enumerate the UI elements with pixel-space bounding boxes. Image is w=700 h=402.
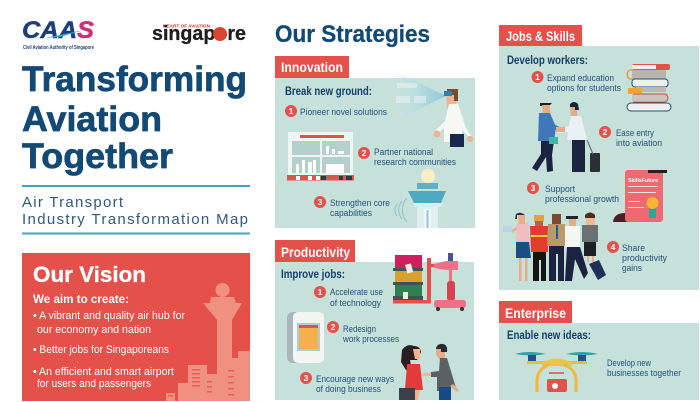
tab: jobs and skills — [499, 25, 582, 46]
item 3 — [527, 182, 619, 204]
item 2 — [599, 126, 662, 148]
item 3 — [314, 196, 390, 218]
item 4: Share — [622, 243, 645, 253]
subheading: break new ground: Break new ground: — [285, 86, 372, 98]
item 3: 3 — [531, 183, 536, 193]
subheading: develop workers: Develop workers: — [507, 55, 588, 67]
item 4: productivity — [622, 253, 667, 263]
item 3: of doing business — [316, 384, 381, 394]
text: develop new businesses: businesses together — [607, 368, 681, 378]
icon: research dashboard screen — [287, 132, 354, 180]
vision list — [33, 310, 185, 390]
item 3: 3 — [318, 197, 323, 207]
icon: baggage scanner — [393, 253, 466, 311]
item 3: professional growth — [545, 194, 619, 204]
item 2: Partner national — [374, 147, 433, 157]
subtitle: Air Transport — [22, 194, 124, 211]
subtitle: Industry Transformation Map — [22, 211, 248, 228]
item 3: 3 — [304, 373, 309, 383]
icon: control tower — [395, 169, 446, 228]
logo: Heart of Aviation Singapore: HEART OF AVIATION — [163, 24, 210, 28]
heading: our strategies: Our Strategies — [275, 21, 430, 48]
item 2: Redesign — [343, 324, 376, 334]
subheading: improve jobs: Improve jobs: — [281, 269, 345, 281]
tab: jobs and skills: Jobs & Skills — [506, 29, 575, 44]
title: Transforming — [22, 60, 247, 99]
icon: changi control tower skyline — [166, 283, 250, 401]
title: Together — [22, 137, 173, 176]
logo: CAAS: Civil Aviation Authority of Singapore — [23, 45, 94, 51]
panel: innovation — [275, 56, 475, 228]
vision list: • An efficient and smart airport — [33, 366, 174, 378]
item 1: options for students — [547, 83, 621, 93]
icon: tablet checklist — [287, 312, 324, 363]
item 4: gains — [622, 263, 642, 273]
item 3 — [300, 372, 394, 394]
tab: innovation: Innovation — [281, 60, 343, 75]
item 1: 1 — [289, 106, 294, 116]
item 2: into aviation — [616, 138, 662, 148]
icon: student and pilot shaking hands — [532, 102, 600, 172]
item 2 — [358, 147, 456, 167]
icon: skillsfuture certificate — [613, 170, 667, 222]
icon: stack of books — [627, 64, 671, 111]
tab: innovation — [275, 56, 349, 78]
heading: our vision: Our Vision — [33, 262, 146, 287]
item 4: 4 — [611, 242, 616, 252]
vision list: our economy and nation — [37, 324, 151, 336]
logo: Heart of Aviation Singapore: singapore — [152, 23, 246, 45]
item 1: 1 — [535, 72, 540, 82]
item 2: Ease entry — [616, 128, 654, 138]
item 1: of technology — [330, 298, 381, 308]
icon: aviation workers group — [503, 212, 606, 281]
text: develop new businesses — [607, 358, 681, 378]
item 2: 2 — [603, 127, 608, 137]
item 2: research communities — [374, 157, 456, 167]
item 1: Accelerate use — [330, 287, 383, 297]
item 2: work processes — [342, 334, 399, 344]
subheading: We aim to create: — [33, 294, 129, 306]
subtitle — [22, 194, 248, 228]
item 1: Pioneer novel solutions — [300, 107, 387, 117]
tab: enterprise — [499, 301, 572, 323]
item 4 — [607, 241, 667, 273]
panel: our vision — [22, 253, 250, 401]
item 1: 1 — [318, 287, 323, 297]
vision list: • A vibrant and quality air hub for — [33, 310, 185, 322]
item 3: Support — [545, 184, 575, 194]
vision list: for users and passengers — [37, 378, 152, 390]
item 2: 2 — [331, 322, 336, 332]
vision list: • Better jobs for Singaporeans — [33, 344, 170, 356]
item 2 — [327, 321, 399, 344]
icon: drone — [515, 352, 598, 392]
tab: productivity: Productivity — [281, 245, 350, 260]
item 3: Strengthen core — [330, 198, 390, 208]
logo: CAAS: CAAS — [22, 17, 94, 44]
item 1 — [532, 71, 621, 93]
tab: enterprise: Enterprise — [505, 306, 566, 321]
text: develop new businesses: Develop new — [607, 358, 651, 368]
item 1 — [285, 105, 387, 117]
panel: jobs and skills — [499, 25, 699, 290]
title — [22, 60, 247, 176]
tab: productivity — [275, 240, 355, 262]
item 1: Expand education — [547, 73, 614, 83]
item 3: Encourage new ways — [316, 374, 394, 384]
icon: skillsfuture certificate: SkillsFuture — [628, 178, 658, 184]
item 2: 2 — [362, 148, 367, 158]
subheading: enable new ideas: Enable new ideas: — [507, 330, 591, 342]
panel: enterprise — [499, 301, 699, 400]
item 3: capabilities — [330, 208, 372, 218]
item 1 — [314, 286, 383, 308]
title: Aviation — [22, 100, 162, 139]
panel: productivity — [275, 240, 474, 400]
icon: man with vr headset — [392, 70, 473, 147]
icon: two people meeting — [399, 344, 459, 400]
